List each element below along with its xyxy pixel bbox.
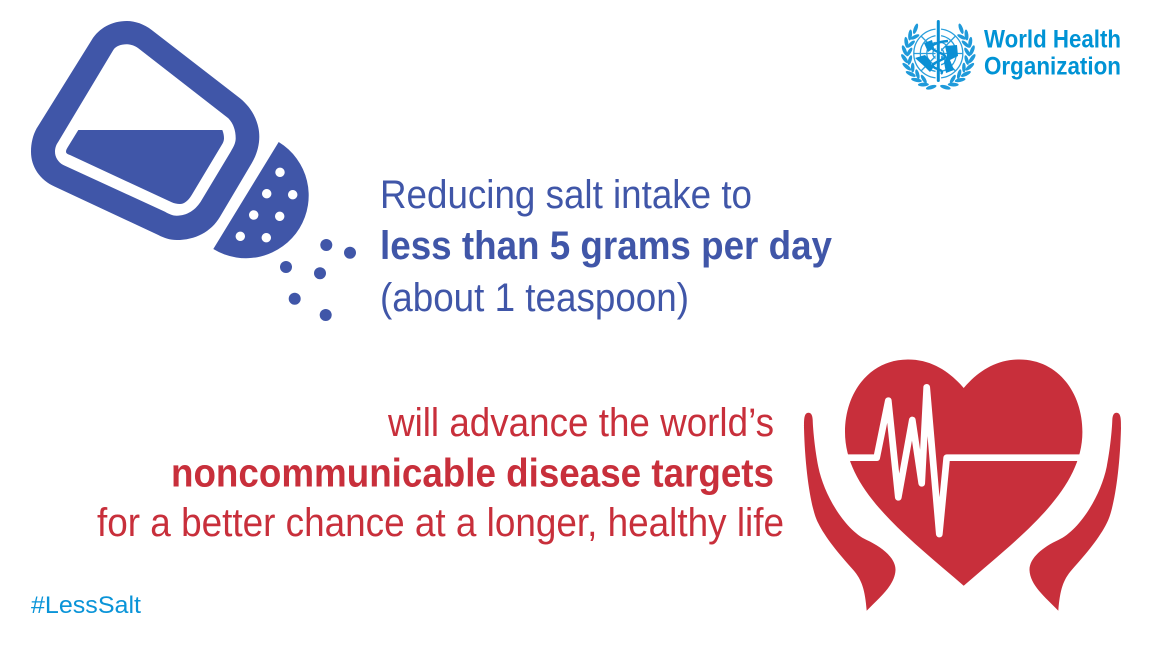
hashtag: #LessSalt — [31, 592, 141, 619]
heartbeat line — [845, 387, 1085, 534]
logo wordmark: Organization — [984, 52, 1121, 80]
right hand — [1029, 413, 1121, 611]
logo wordmark: World Health — [984, 26, 1121, 54]
heart — [845, 360, 1082, 586]
text block: salt target: Reducing salt intake to — [380, 173, 752, 217]
left hand — [804, 413, 896, 611]
text block: salt target — [380, 173, 832, 320]
icon: salt shaker — [31, 21, 356, 321]
text block: disease targets: noncommunicable disease targets — [171, 452, 774, 496]
salt level inside shaker — [66, 130, 224, 204]
logo: World Health Organization — [900, 20, 1121, 91]
text block: salt target: (about 1 teaspoon) — [380, 276, 689, 320]
icon: WHO emblem — [900, 20, 977, 91]
text block: disease targets — [97, 401, 784, 545]
text block: disease targets: for a better chance at a longer, healthy life — [97, 501, 784, 545]
logo wordmark — [984, 26, 1121, 80]
falling salt grains — [280, 239, 356, 321]
shaker cap with holes — [213, 142, 309, 258]
text block: disease targets: will advance the world’s — [387, 401, 774, 445]
shaker body — [31, 21, 259, 240]
text block: salt target: less than 5 grams per day — [380, 224, 832, 268]
icon: heart held by hands — [804, 360, 1121, 611]
